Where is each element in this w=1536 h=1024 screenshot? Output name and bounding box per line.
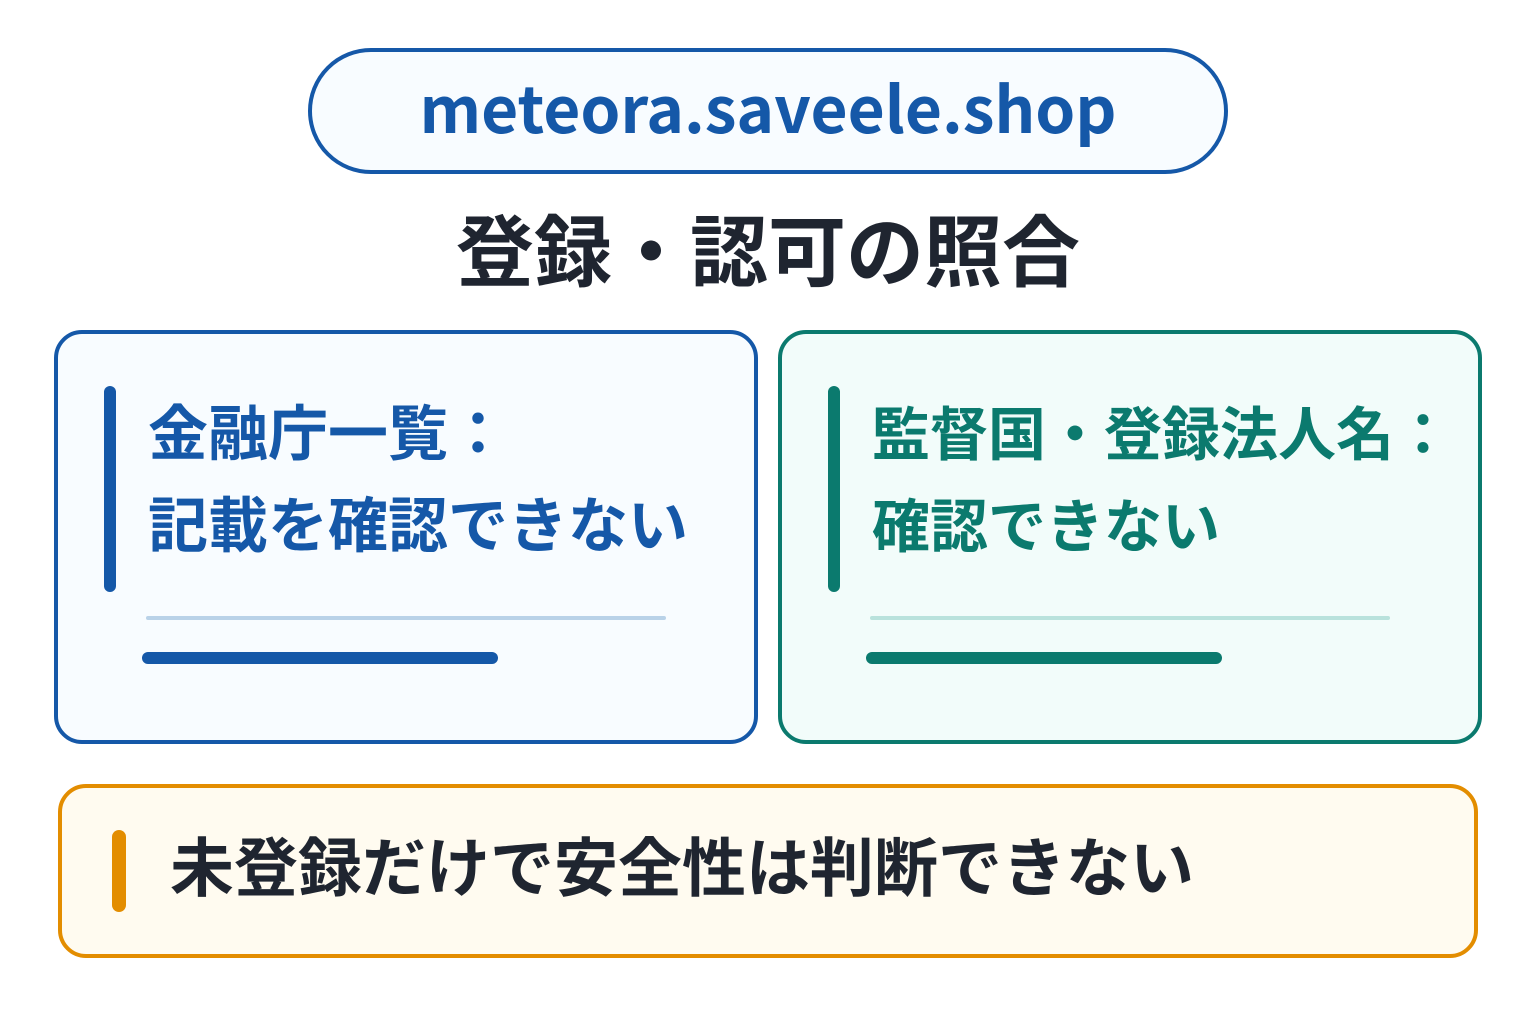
divider <box>146 616 666 620</box>
accent bar <box>104 386 116 592</box>
panel heading: 金融庁一覧： <box>148 386 508 473</box>
accent bar <box>112 830 126 912</box>
progress bar <box>866 652 1222 664</box>
progress bar <box>142 652 498 664</box>
accent bar <box>828 386 840 592</box>
panel heading: 記載を確認できない <box>148 478 688 565</box>
panel: FSA list <box>54 330 758 744</box>
panel heading: 確認できない <box>872 480 1220 564</box>
panel heading <box>872 388 1452 564</box>
warning panel <box>58 784 1478 958</box>
domain pill <box>308 48 1228 174</box>
divider <box>870 616 1390 620</box>
domain text: meteora.saveele.shop <box>420 60 1116 152</box>
panel heading: 監督国・登録法人名： <box>872 388 1452 472</box>
title: 登録・認可の照合 <box>456 191 1080 303</box>
panel: regulator and entity <box>778 330 1482 744</box>
warning text: 未登録だけで安全性は判断できない <box>170 818 1194 910</box>
panel heading <box>148 386 688 565</box>
